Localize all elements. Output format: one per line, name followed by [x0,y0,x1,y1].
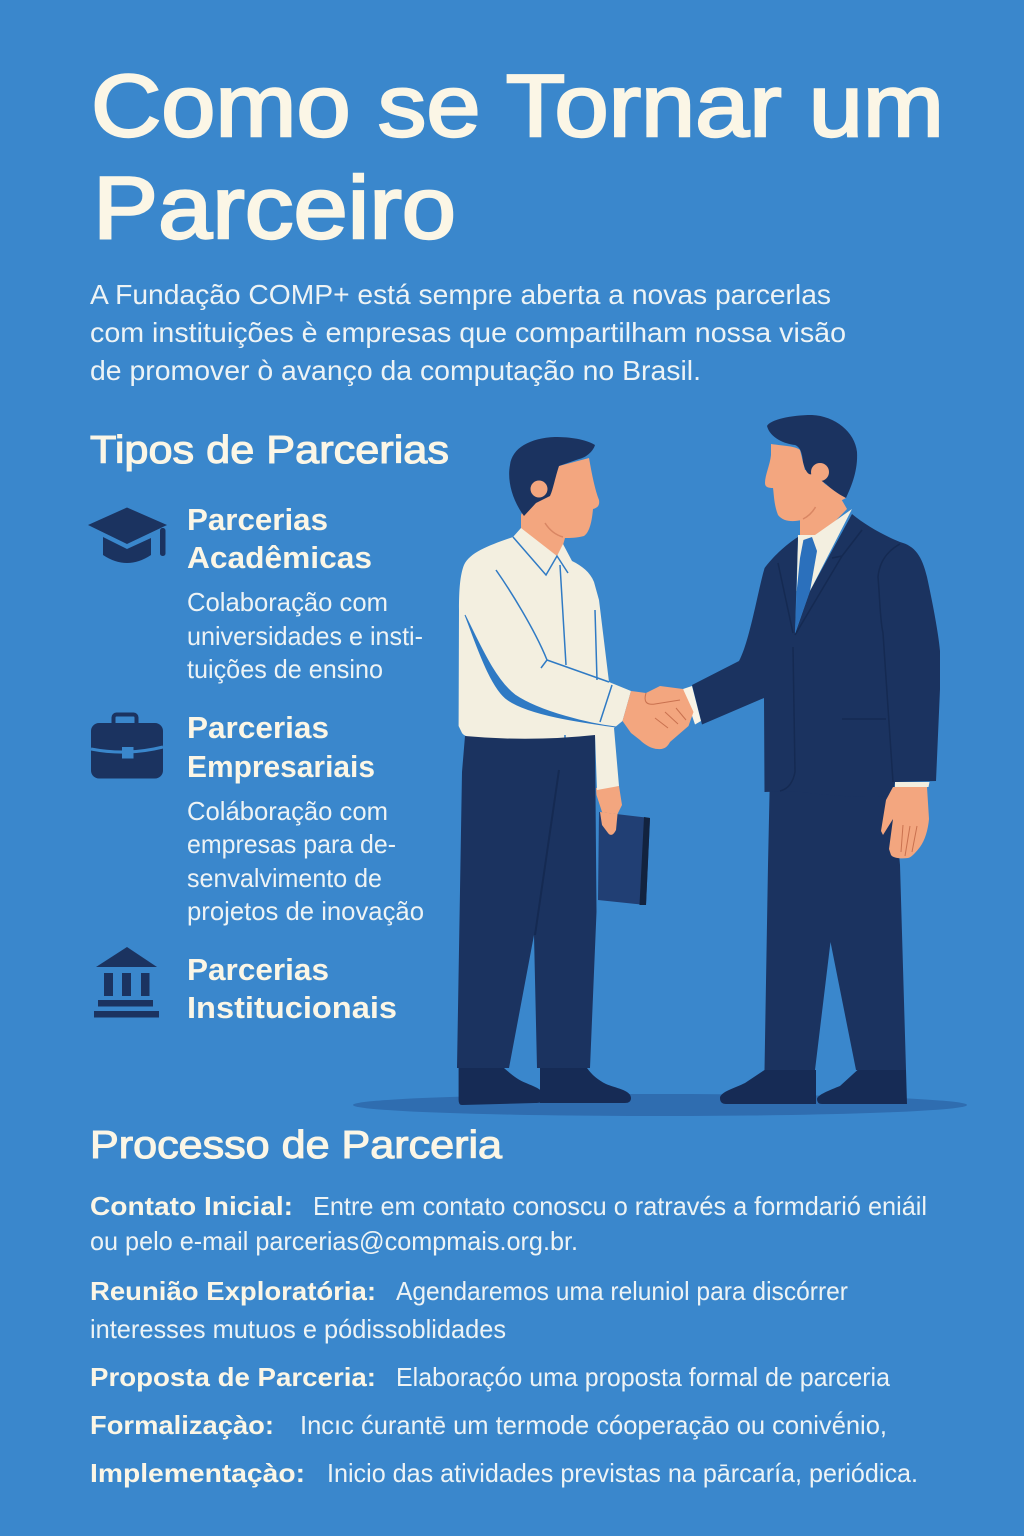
process steps [90,1191,927,1488]
text: parcerias academicas [187,502,423,684]
icon: graduation cap [88,508,167,563]
step: reuniao exploratoria: interesses mutuos e pódissoblidades [90,1314,506,1344]
text: parcerias institucionais: Institucionais [187,990,397,1025]
step: implementacao: Inicio das atividades previstas na pārcaría, periódica. [327,1458,918,1488]
intro text [90,279,846,386]
step: contato inicial [90,1191,927,1256]
intro text: A Fundação COMP+ está sempre aberta a novas parcerlas [90,279,831,310]
text: parcerias empresariais [187,710,424,926]
title [91,56,944,257]
step: contato inicial: Entre em contato conoscu o ratravés a formdarió eniáil [313,1191,927,1221]
text: parcerias academicas: Colaboração com [187,587,388,617]
title: Parceiro [93,158,456,257]
intro text: de promover ò avanço da computação no Brasil. [90,355,701,386]
step: proposta de parceria: Proposta de Parceria: [90,1362,376,1392]
person right [692,415,940,1104]
title: Como se Tornar um [91,56,944,155]
text: parcerias academicas: universidades e insti- [187,621,423,651]
handshake hands [622,686,701,749]
text: parcerias empresariais: Parcerias [187,710,329,745]
step: reuniao exploratoria [90,1276,848,1344]
intro text: com instituições è empresas que compartilham nossa visão [90,317,846,348]
text: parcerias academicas: tuições de ensino [187,654,383,684]
step: reuniao exploratoria: Agendaremos uma reluniol para discórrer [396,1276,848,1306]
ground shadow [353,1094,967,1116]
icon: briefcase [91,714,163,778]
heading: tipos de parcerias: Tipos de Parcerias [90,429,449,472]
icon: institution building [94,947,159,1018]
step: formalizacao: Incıc ćurantē um termode cóoperaçāo ou conivḗnio, [300,1410,887,1440]
text: parcerias empresariais: projetos de inovação [187,896,424,926]
text: parcerias academicas: Acadêmicas [187,540,372,575]
step: implementacao: Implementaçào: [90,1458,305,1488]
step: implementacao [90,1458,918,1488]
step: proposta de parceria: Elaboraçóo uma proposta formal de parceria [396,1362,891,1392]
step: contato inicial: ou pelo e-mail parcerias@compmais.org.br. [90,1226,578,1256]
text: parcerias empresariais: Empresariais [187,749,375,784]
heading: processo de parceria: Processo de Parceria [90,1124,502,1167]
text: parcerias institucionais: Parcerias [187,952,329,987]
text: parcerias institucionais [187,952,397,1025]
text: parcerias academicas: Parcerias [187,502,328,537]
step: reuniao exploratoria: Reunião Exploratória: [90,1276,376,1306]
person left [457,437,650,1105]
step: formalizacao: Formalizaçào: [90,1410,274,1440]
text: parcerias empresariais: empresas para de- [187,829,396,859]
text: parcerias empresariais: senvalvimento de [187,863,382,893]
step: contato inicial: Contato Inicial: [90,1191,293,1221]
step: proposta de parceria [90,1362,891,1392]
text: parcerias empresariais: Coláboração com [187,796,388,826]
illustration: handshake [353,415,967,1116]
